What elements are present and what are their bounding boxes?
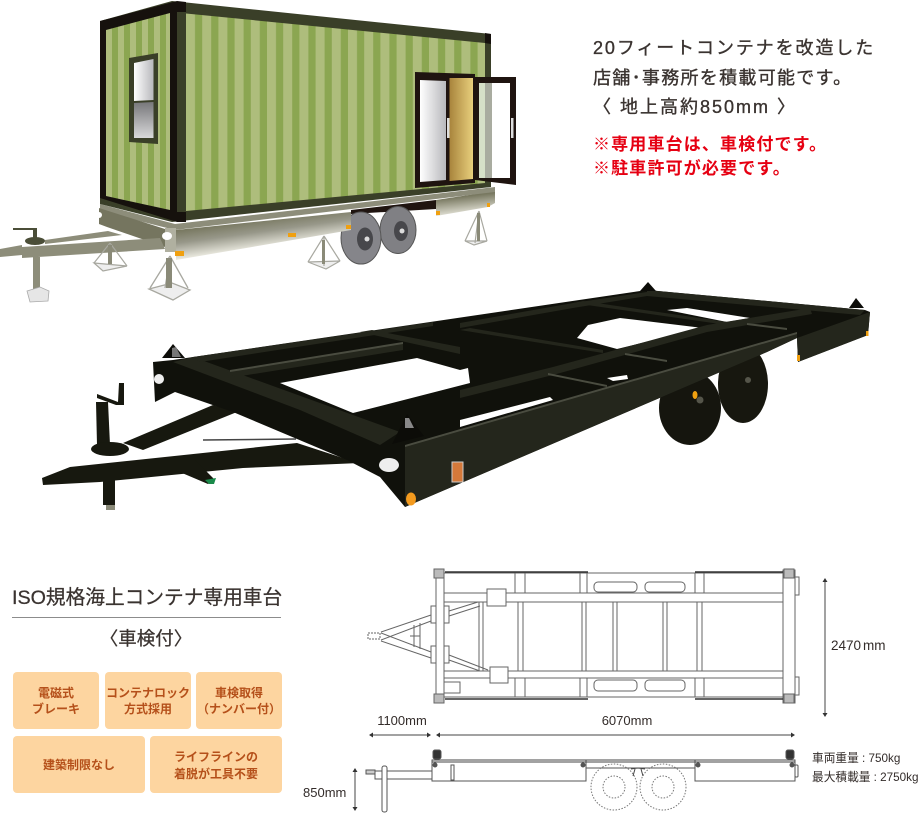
dimension: 6070mm: 6070mm	[602, 713, 652, 728]
dimension: 2470mm: 2470mm	[831, 638, 886, 653]
chassis openings	[280, 308, 750, 427]
box: container lock: コンテナロック	[106, 686, 190, 700]
description text: 20フィートコンテナを改造した	[593, 38, 875, 58]
trailer wheels	[341, 206, 416, 264]
dimension: 1100mm	[369, 713, 431, 738]
dimension: 850mm: 850mm	[303, 785, 346, 800]
tow bar	[0, 228, 165, 289]
specs text: 最大積載量 : 2750kg	[812, 770, 919, 784]
subheading: 〈車検付〉	[100, 628, 192, 649]
red notes: ※専用車台は、車検付です。	[593, 134, 827, 154]
box: inspection	[196, 672, 282, 729]
twist locks	[162, 282, 864, 444]
illustration: container on trailer	[0, 1, 516, 302]
feature boxes	[13, 672, 282, 793]
box: lifelines: 着脱が工具不要	[174, 766, 258, 781]
dimension: 1100mm: 1100mm	[377, 713, 427, 728]
chassis frame	[153, 290, 870, 507]
dimension: width arrow	[822, 578, 828, 717]
box: no building restriction	[13, 736, 145, 793]
diagram: side view	[366, 750, 798, 812]
box: no building restriction: 建築制限なし	[43, 757, 115, 772]
door	[415, 72, 516, 188]
chassis beams	[173, 290, 870, 507]
dimension: 6070mm	[436, 713, 795, 738]
container side wall	[186, 14, 485, 211]
chassis tongue	[42, 383, 360, 510]
chassis wheels	[659, 345, 768, 445]
box: inspection: （ナンバー付）	[197, 701, 281, 716]
heading rule	[12, 617, 281, 618]
support jack: rear right	[465, 211, 487, 245]
corner post	[177, 12, 186, 212]
box: brake	[13, 672, 99, 729]
corner caps	[177, 1, 491, 222]
heading: ISO規格海上コンテナ専用車台	[12, 587, 282, 609]
description text	[593, 38, 875, 117]
chassis beam highlights	[230, 323, 797, 447]
red notes: ※駐車許可が必要です。	[593, 158, 791, 178]
dimension: 850mm	[303, 768, 358, 811]
diagram: top view	[368, 569, 799, 703]
window	[129, 53, 158, 144]
red notes	[593, 134, 827, 178]
container end wall	[106, 13, 170, 210]
box: brake: ブレーキ	[32, 701, 80, 716]
box: lifelines: ライフラインの	[174, 750, 258, 764]
box: brake: 電磁式	[38, 685, 74, 700]
container frame	[100, 1, 491, 222]
box: container lock: 方式採用	[124, 701, 172, 716]
description text: 店舗･事務所を積載可能です。	[593, 68, 852, 88]
support jack: front	[94, 243, 127, 271]
chassis lights	[154, 331, 868, 506]
rear trailer skirt	[351, 191, 495, 216]
specs text: 車両重量 : 750kg	[812, 751, 900, 765]
box: container lock	[105, 672, 191, 729]
trailer side beam	[96, 187, 495, 260]
box: lifelines	[150, 736, 282, 793]
tow bar support block	[27, 287, 49, 302]
specs text	[812, 751, 919, 784]
support jack: front corner	[149, 256, 190, 300]
support jack: middle	[308, 236, 340, 269]
box: inspection: 車検取得	[215, 685, 263, 700]
photo: black trailer chassis	[42, 282, 870, 510]
container end frame	[100, 1, 177, 222]
description text: 〈 地上高約850mm 〉	[593, 97, 797, 117]
